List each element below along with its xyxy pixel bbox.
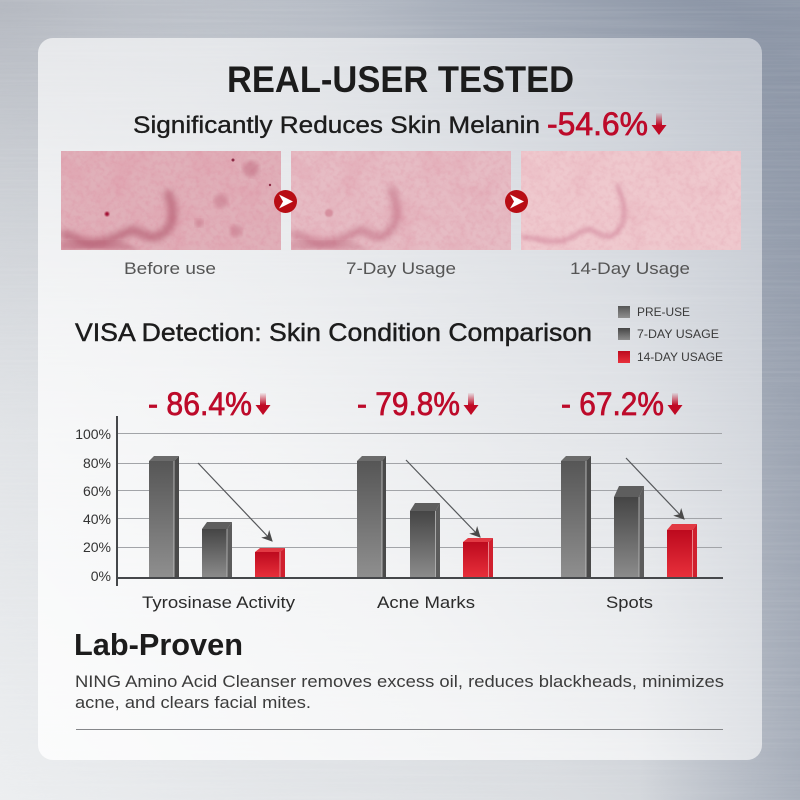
- y axis labels: 20%: [83, 539, 111, 555]
- arrow: acne trend: [406, 460, 480, 537]
- arrow: spots trend: [626, 458, 684, 519]
- y axis labels: 100%: [75, 426, 111, 442]
- arrow: tyrosinase trend: [198, 463, 272, 541]
- bar chart: [75, 416, 723, 612]
- y axis labels: 80%: [83, 455, 111, 471]
- body text: [75, 672, 724, 712]
- category labels: Spots: [606, 593, 653, 612]
- photo captions: 7-Day Usage: [346, 259, 456, 278]
- body text: NING Amino Acid Cleanser removes excess oil, reduces blackheads, minimizes: [75, 672, 724, 691]
- y axis labels: 0%: [91, 568, 111, 584]
- legend: PRE-USE: [637, 305, 690, 319]
- subtitle with melanin reduction: Significantly Reduces Skin Melanin: [133, 112, 540, 139]
- photo: 7-day usage: [291, 151, 511, 250]
- heading: Lab-Proven: Lab-Proven: [74, 627, 243, 662]
- icon: arrow between before and 7-day: [274, 190, 297, 213]
- photo captions: Before use: [124, 259, 216, 278]
- reduction figure: spots: - 67.2%: [561, 386, 664, 422]
- photo captions: 14-Day Usage: [570, 259, 690, 278]
- icon: arrow between 7-day and 14-day: [505, 190, 528, 213]
- y axis labels: 40%: [83, 511, 111, 527]
- subtitle with melanin reduction: [133, 106, 666, 142]
- category labels: [142, 593, 653, 612]
- photo captions: [124, 259, 690, 278]
- y axis labels: 60%: [83, 483, 111, 499]
- subtitle with melanin reduction: -54.6%: [547, 106, 648, 142]
- acne bars: [357, 456, 493, 578]
- legend: 7-DAY USAGE: [637, 327, 719, 341]
- y axis labels: [75, 426, 111, 584]
- title: REAL-USER TESTED: [227, 59, 574, 100]
- legend: 14-DAY USAGE: [637, 350, 723, 364]
- reduction figure: acne marks: - 79.8%: [357, 386, 460, 422]
- reduction figure: tyrosinase: - 86.4%: [148, 386, 252, 422]
- axes: [116, 416, 723, 586]
- category labels: Tyrosinase Activity: [142, 593, 296, 612]
- legend: [618, 305, 723, 364]
- tyrosinase bars: [149, 456, 285, 578]
- photo: 14-day usage: [521, 151, 741, 250]
- spots bars: [561, 456, 697, 578]
- body text: acne, and clears facial mites.: [75, 693, 311, 712]
- category labels: Acne Marks: [377, 593, 475, 612]
- photo: before use: [61, 151, 281, 250]
- heading: VISA detection: VISA Detection: Skin Condition Comparison: [75, 319, 592, 347]
